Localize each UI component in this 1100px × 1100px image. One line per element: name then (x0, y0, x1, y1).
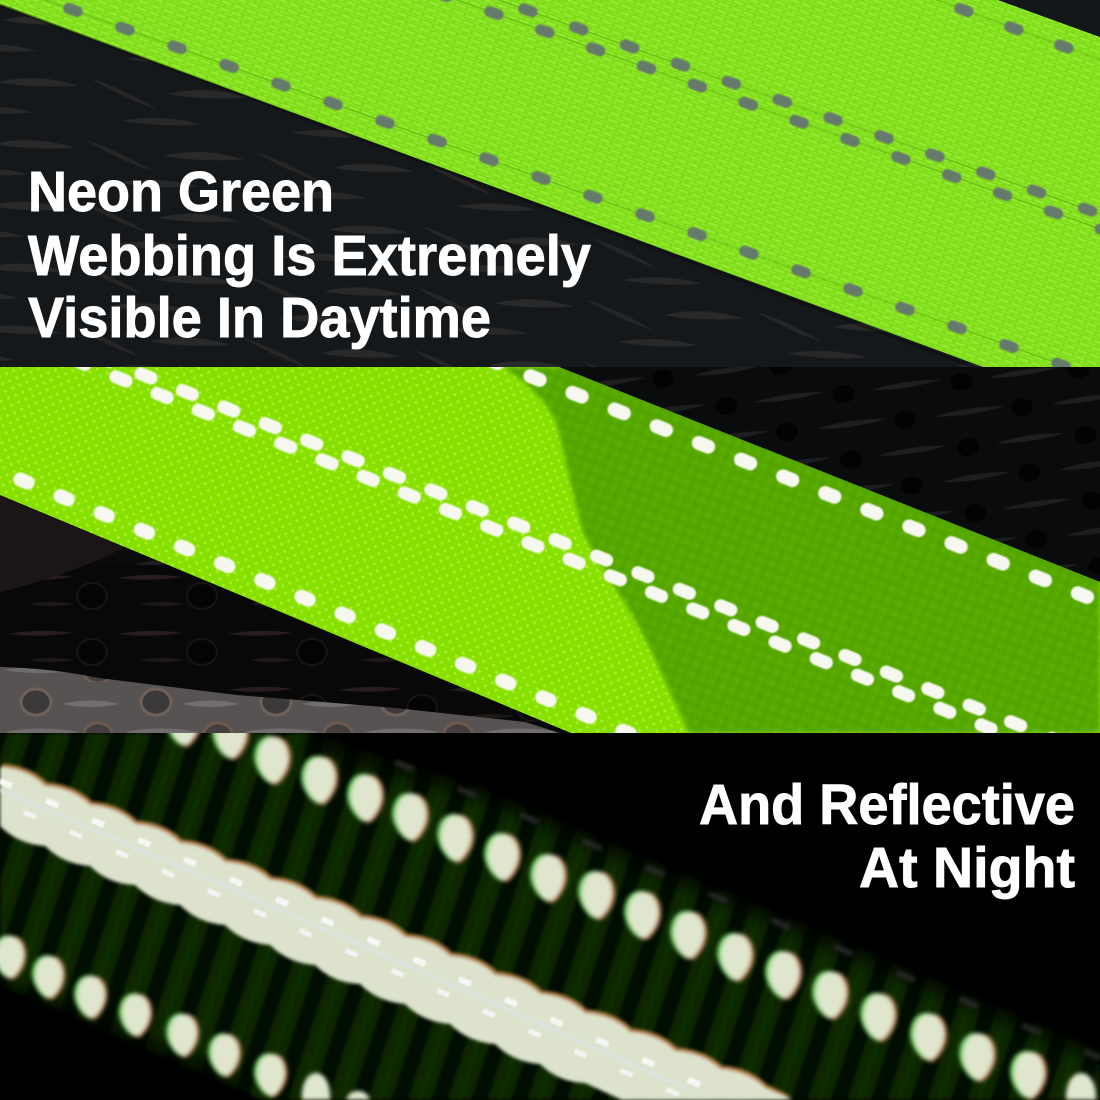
stitching row: middle lower (443, 0, 1100, 240)
faint top stitching (395, 762, 1100, 1058)
reflective stitching: middle upper (104, 367, 1059, 733)
stitching rows (21, 0, 1100, 379)
darkened lower band edge (0, 985, 235, 1085)
cut-off dot at the bottom right (1066, 1073, 1096, 1100)
green webbing band (0, 367, 1100, 733)
stripe pale blue centre line (0, 790, 690, 1090)
cut-off dot sliver at the bottom (346, 1091, 370, 1100)
top left green corner (0, 0, 998, 5)
top right dark corner (998, 0, 1100, 37)
dark green webbing band (0, 733, 1100, 1100)
panel: webbing at night (0, 698, 1100, 1100)
dark fabric wedge lower left (0, 495, 125, 592)
darkened upper band edge (310, 736, 1100, 1047)
reflective stitching: middle lower (74, 367, 999, 733)
stitching row: middle upper (517, 2, 1098, 218)
heading line 1: And Reflective (699, 773, 1075, 837)
heading line 1: Neon Green (28, 160, 334, 224)
panel: daytime webbing (0, 0, 1100, 367)
reflective stitches (12, 367, 1096, 733)
stripe body with scalloped edges (0, 767, 793, 1100)
black background (0, 733, 1100, 1100)
lower edge shadow line (0, 4, 977, 367)
heading: neon green webbing (28, 160, 591, 350)
heading line 3: Visible In Daytime (28, 286, 491, 350)
highlights lower row (0, 802, 680, 1095)
black rubber tread background (0, 0, 1100, 367)
heading: reflective at night (699, 773, 1075, 900)
cut-off dot at the bottom (302, 1073, 330, 1100)
grey lit tread strip (0, 667, 560, 733)
shadow across webbing (504, 367, 1100, 733)
reflective stripe (0, 764, 793, 1100)
dark tread background lower left (0, 564, 546, 725)
heading line 2: Webbing Is Extremely (28, 224, 591, 288)
heading line 2: At Night (859, 836, 1075, 900)
reflective stitching: lower edge (12, 471, 638, 733)
stitching row: lower edge (21, 0, 1100, 379)
dark tread background upper right (29, 367, 1100, 582)
reflective dots upper row (165, 698, 1096, 1100)
stitch thread lines (21, 0, 1100, 379)
stripe warm upper fringe (2, 764, 792, 1096)
panel: webbing in sunlight and shadow (0, 359, 1100, 760)
reflective dots lower row (0, 935, 370, 1100)
highlights upper row (0, 781, 700, 1085)
stripe highlights (0, 781, 700, 1095)
neon green webbing band (0, 0, 1100, 367)
reflective stitching: upper edge (493, 361, 1100, 612)
stitching row: upper edge (953, 2, 1074, 54)
